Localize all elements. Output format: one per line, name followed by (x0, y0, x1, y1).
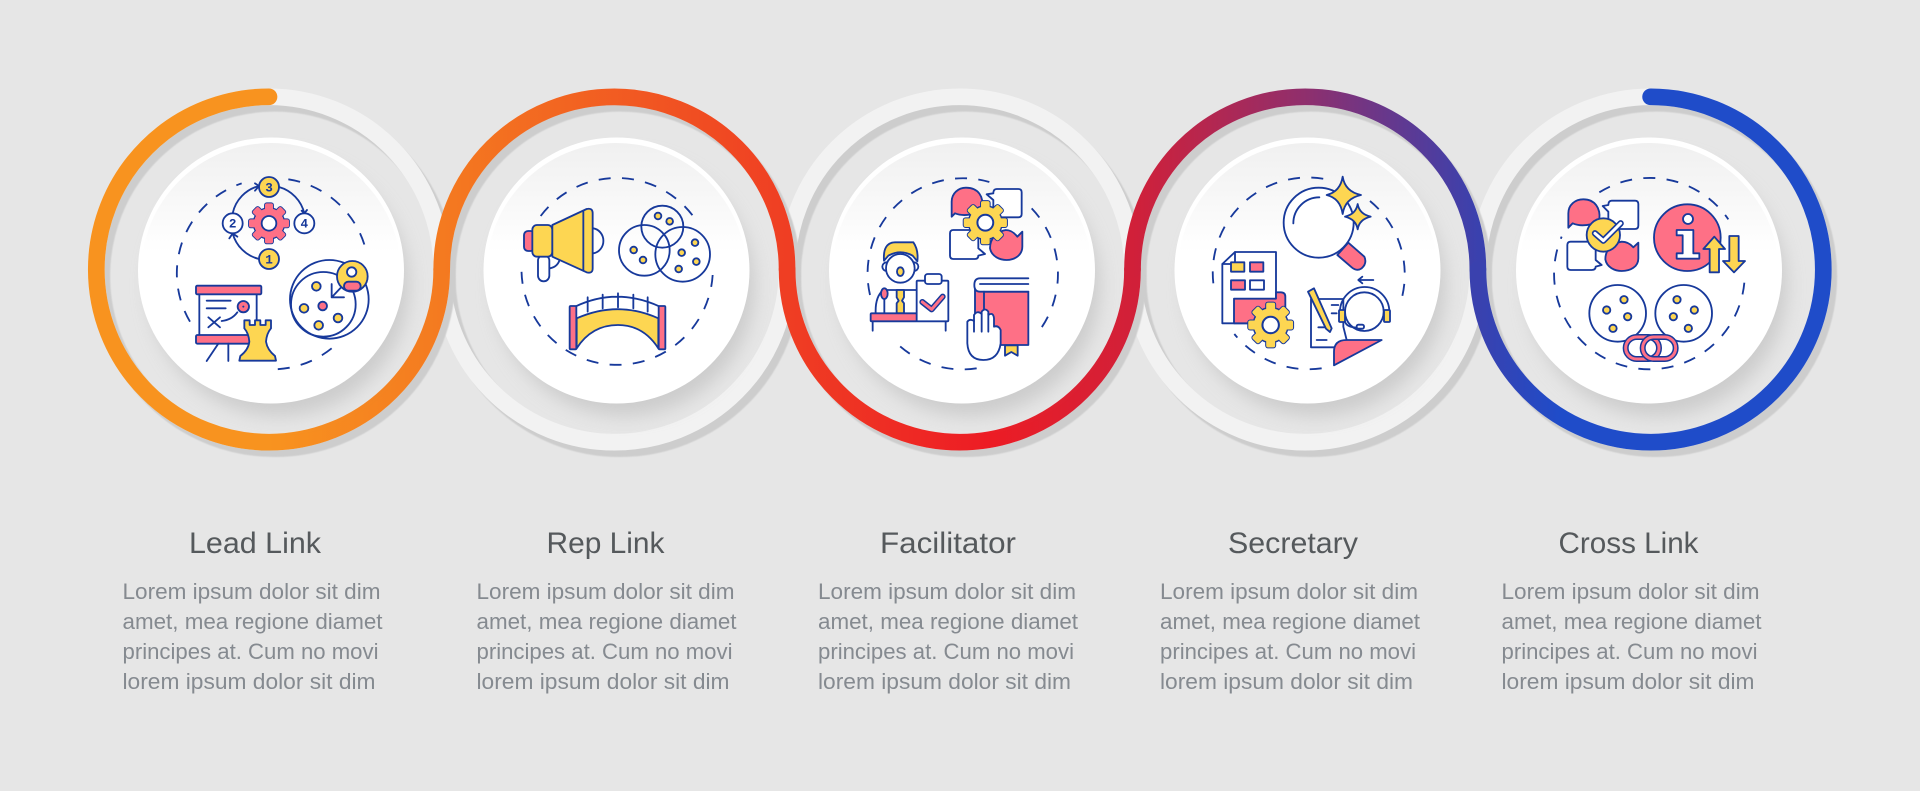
heading: Facilitator (880, 527, 1016, 560)
icon: process gear, strategy board, team circle: 3 (265, 180, 273, 195)
body text: Lorem ipsum dolor sit dim (476, 579, 734, 604)
icon: chat check, info arrows, linked circles (1554, 178, 1745, 369)
icon: process gear, strategy board, team circle: 1 (265, 252, 273, 267)
heading: Cross Link (1558, 527, 1699, 560)
body text: lorem ipsum dolor sit dim (1502, 669, 1754, 694)
icon: megaphone, venn circles, bridge (521, 178, 713, 365)
icon: magnifier, document, note taker (1213, 177, 1405, 369)
body text: amet, mea regione diamet (122, 609, 382, 634)
heading: Rep Link (546, 527, 665, 560)
coloured serpentine ribbon (96, 97, 1823, 442)
body text: Lorem ipsum dolor sit dim (1160, 579, 1418, 604)
icon: process gear, strategy board, team circle: 4 (301, 217, 309, 232)
body text: principes at. Cum no movi (122, 639, 378, 664)
icon: process gear, strategy board, team circle (177, 177, 369, 369)
body text (1160, 579, 1420, 694)
body text: amet, mea regione diamet (1502, 609, 1762, 634)
body text: principes at. Cum no movi (1160, 639, 1416, 664)
body text: Lorem ipsum dolor sit dim (818, 579, 1076, 604)
body text: principes at. Cum no movi (818, 639, 1074, 664)
body text: lorem ipsum dolor sit dim (1160, 669, 1413, 694)
body text (1502, 579, 1762, 694)
body text: amet, mea regione diamet (476, 609, 736, 634)
body text: Lorem ipsum dolor sit dim (1502, 579, 1760, 604)
heading: Lead Link (189, 527, 322, 560)
panel: Rep Link (476, 138, 754, 694)
disc (1174, 138, 1446, 416)
body text: lorem ipsum dolor sit dim (818, 669, 1071, 694)
panel: Facilitator (818, 138, 1100, 694)
disc (484, 138, 754, 416)
body text: principes at. Cum no movi (476, 639, 732, 664)
body text: lorem ipsum dolor sit dim (122, 669, 376, 694)
body text (818, 579, 1078, 694)
body text: principes at. Cum no movi (1502, 639, 1758, 664)
panel: Cross Link (1502, 138, 1787, 694)
disc (1516, 138, 1787, 416)
disc (829, 138, 1100, 416)
panel: Secretary (1160, 138, 1446, 694)
body text: Lorem ipsum dolor sit dim (122, 579, 380, 604)
body text: lorem ipsum dolor sit dim (476, 669, 730, 694)
body text: amet, mea regione diamet (818, 609, 1078, 634)
panel: Lead Link (122, 138, 409, 694)
heading: Secretary (1228, 527, 1358, 560)
body text (122, 579, 382, 694)
ring track: light rings with offset shadows (96, 97, 1829, 449)
body text (476, 579, 736, 694)
icon: speaker, chat gear, rule book (868, 178, 1058, 369)
body text: amet, mea regione diamet (1160, 609, 1420, 634)
disc (138, 138, 409, 416)
icon: process gear, strategy board, team circle: 2 (229, 217, 236, 232)
